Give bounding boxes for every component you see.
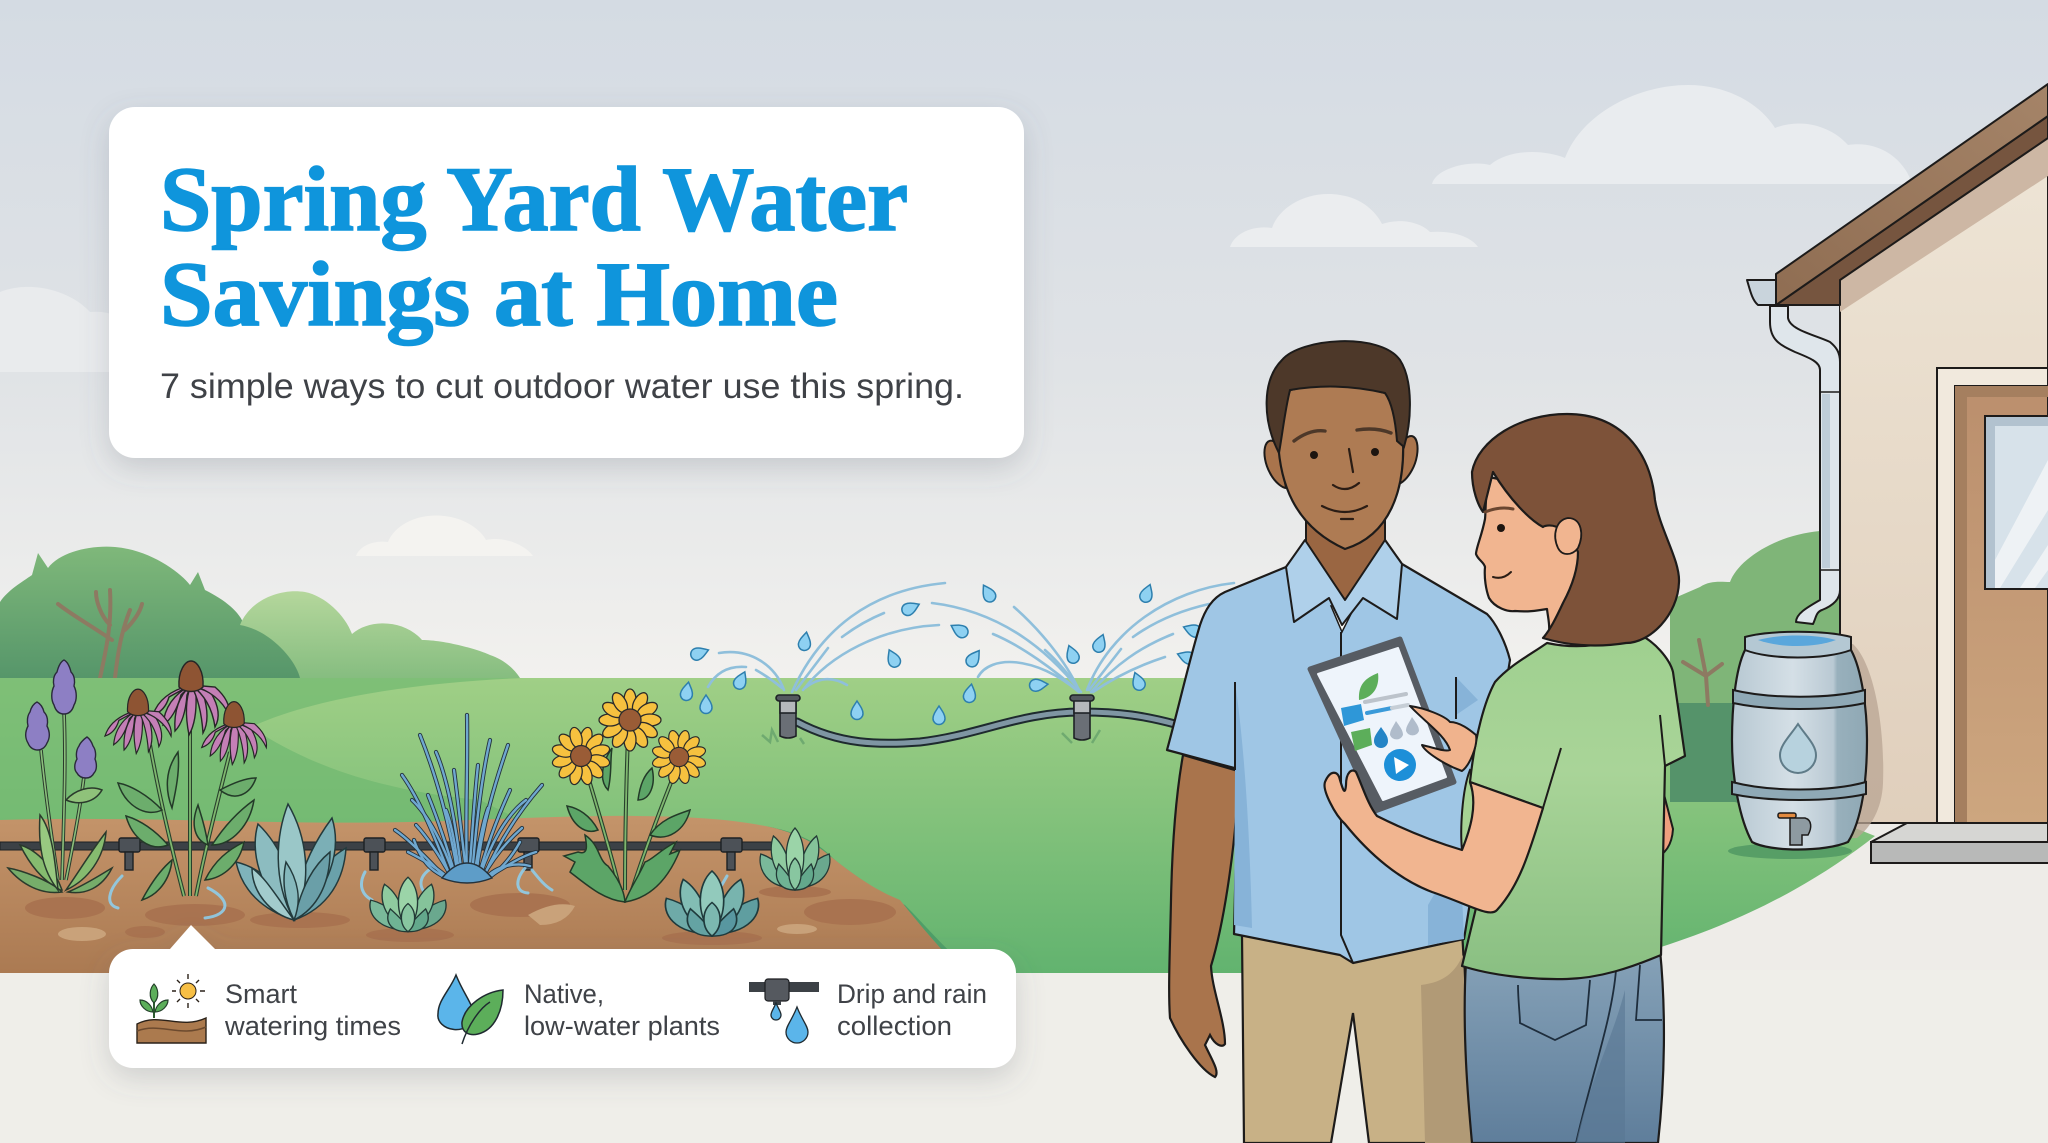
- tablet leaf logo: [1359, 673, 1378, 700]
- woman facial features: [1485, 508, 1513, 578]
- barrel rim: [1745, 632, 1851, 658]
- bush: right darker lower: [1670, 703, 1850, 806]
- man undershirt: [1331, 606, 1355, 632]
- ground: [0, 970, 2048, 1143]
- barrel spigot: [1778, 813, 1811, 845]
- cloud: small above bushes: [356, 515, 533, 556]
- cloud: large upper right: [1432, 85, 1912, 184]
- tablet water drops: [1374, 727, 1388, 748]
- label: collection: [837, 1011, 952, 1041]
- woman sleeve line: [1470, 715, 1665, 808]
- barrel ground shadow: [1728, 843, 1852, 859]
- entry step: [1871, 823, 2048, 842]
- water droplets: [679, 582, 1203, 724]
- door window: [1985, 416, 2048, 589]
- barrel water: [1758, 636, 1836, 646]
- legend item: native plants: [438, 975, 720, 1044]
- woman holding arm: [1325, 771, 1543, 912]
- lavender leaves: [8, 788, 112, 893]
- bush: light middle: [240, 591, 520, 678]
- man face: [1278, 385, 1403, 549]
- water spray arcs: [708, 583, 1234, 692]
- barrel drop emblem: [1780, 724, 1816, 773]
- cloud: left behind title: [0, 287, 130, 372]
- roof fascia: [1776, 84, 2048, 305]
- label: low-water plants: [524, 1011, 720, 1041]
- tablet progress bars: [1365, 694, 1406, 702]
- tablet play button: [1384, 749, 1416, 781]
- plant: succulents: [370, 828, 830, 936]
- title: Spring Yard Water: [160, 148, 908, 250]
- bush: right behind barrel: [1670, 531, 1850, 802]
- coneflower leaves: [118, 752, 256, 900]
- rain barrel: [1728, 632, 1883, 859]
- grass tufts at sprinklers: [762, 730, 1100, 744]
- soil mounds and stones: [25, 886, 896, 945]
- roof underside: [1776, 116, 2048, 305]
- house wall: [1840, 138, 2048, 823]
- branch right: [1683, 640, 1722, 705]
- plant: lavender: [8, 660, 112, 893]
- garden bed soil: [0, 816, 975, 973]
- sky background: [0, 0, 2048, 680]
- man left arm: [1169, 755, 1238, 1077]
- legend item: drip and rain: [749, 979, 987, 1043]
- person: woman: [1325, 414, 1685, 1143]
- woman pointing hand: [1410, 706, 1476, 771]
- legend panel: [109, 925, 1016, 1068]
- barrel body: [1732, 650, 1867, 850]
- sprinkler hose: [797, 712, 1175, 743]
- man neck: [1306, 520, 1385, 600]
- person: man: [1167, 341, 1510, 1143]
- man collar: [1286, 540, 1402, 625]
- tablet screen: [1318, 648, 1446, 800]
- woman ear: [1555, 518, 1581, 554]
- lawn: [0, 678, 1875, 973]
- man shirt shading: [1234, 677, 1478, 945]
- bush: dark left: [0, 547, 307, 678]
- man hair: [1267, 341, 1410, 453]
- icon: drop and leaf: [438, 975, 503, 1044]
- man shirt: [1167, 540, 1510, 963]
- drip water trails: [110, 868, 727, 918]
- plant: yellow flowers: [545, 689, 712, 902]
- man placket: [1235, 632, 1456, 963]
- label: Smart: [225, 979, 297, 1009]
- sprinkler system: [679, 582, 1234, 744]
- woman hair: [1472, 414, 1679, 645]
- title panel: [109, 107, 1024, 458]
- subtitle: 7 simple ways to cut outdoor water use this spring.: [160, 367, 964, 406]
- woman face: [1476, 477, 1590, 632]
- drip emitters: [119, 838, 742, 870]
- man facial features: [1294, 429, 1391, 519]
- barrel shadow: [1850, 644, 1883, 838]
- plant: agave: [236, 804, 346, 920]
- title: Savings at Home: [160, 243, 838, 345]
- tablet: [1310, 639, 1454, 811]
- cloud: medium upper centre: [1230, 194, 1478, 247]
- door frame: [1937, 368, 2048, 823]
- icon: sprout, sun and soil: [137, 974, 206, 1043]
- lawn: darker left rise: [0, 678, 540, 830]
- plant: blue grass: [395, 715, 542, 883]
- label: Native,: [524, 979, 604, 1009]
- drip irrigation line: [0, 838, 772, 918]
- woman shirt: [1462, 632, 1685, 979]
- woman far arm: [1640, 760, 1673, 860]
- sprinkler heads: [776, 695, 1094, 740]
- woman jeans: [1465, 950, 1664, 1143]
- man ears: [1264, 436, 1418, 488]
- label: Drip and rain: [837, 979, 987, 1009]
- lavender blooms: [26, 660, 96, 778]
- woman side shirt behind arm: [1461, 770, 1500, 870]
- house: [1776, 84, 2048, 863]
- bare branches: [58, 590, 142, 678]
- tablet app icons: [1341, 704, 1364, 726]
- gutter and downspout: [1747, 280, 1840, 624]
- label: watering times: [224, 1011, 401, 1041]
- icon: drip pipe and drops: [749, 979, 819, 1043]
- man trousers: [1242, 930, 1472, 1143]
- jeans pockets and seams: [1518, 965, 1662, 1143]
- legend item: smart watering: [137, 974, 401, 1043]
- barrel bands: [1733, 690, 1865, 709]
- door: [1955, 386, 2048, 823]
- yellow flower leaves: [564, 748, 690, 902]
- plant: coneflowers: [105, 661, 266, 900]
- roof shadow on wall: [1840, 138, 2048, 312]
